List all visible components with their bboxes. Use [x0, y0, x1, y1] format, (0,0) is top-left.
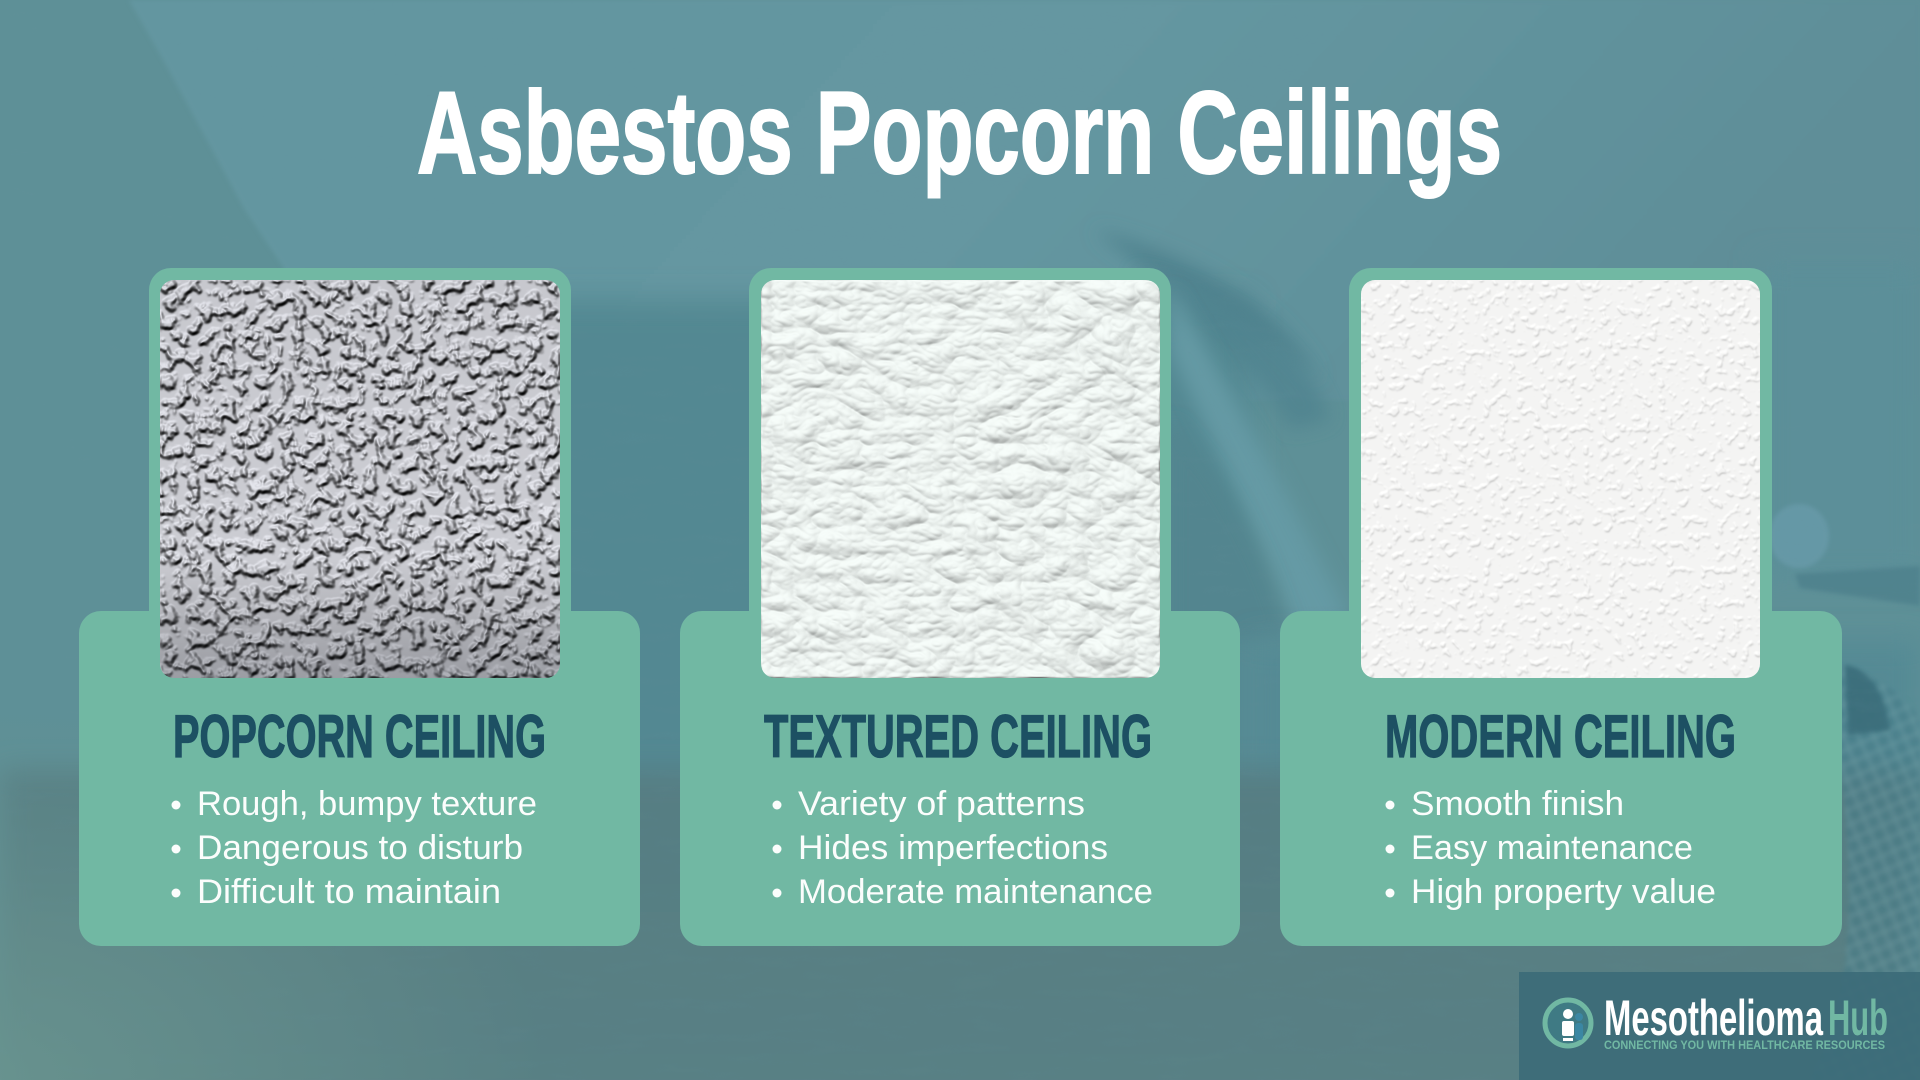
bullet list: Difficult to maintain [197, 873, 501, 911]
bullet list: High property value [1411, 873, 1716, 911]
heading: TEXTURED CEILING [764, 703, 1152, 770]
panel: modern ceiling [1280, 268, 1842, 946]
icon: people in ring [1545, 1000, 1591, 1046]
panel: textured ceiling [680, 268, 1240, 946]
image: textured surface [761, 280, 1160, 678]
bullet list: Smooth finish [1411, 785, 1624, 823]
bullet list: Moderate maintenance [798, 873, 1153, 911]
bullet list [1386, 785, 1716, 911]
bullet list [172, 785, 537, 911]
image: popcorn texture [160, 280, 560, 678]
bullet list: Variety of patterns [798, 785, 1085, 823]
heading: MODERN CEILING [1385, 703, 1736, 770]
bullet list: Easy maintenance [1411, 829, 1693, 867]
bullet list: Rough, bumpy texture [197, 785, 537, 823]
card background [79, 268, 640, 946]
heading: POPCORN CEILING [173, 703, 546, 770]
title: Asbestos Popcorn Ceilings [417, 67, 1502, 198]
logo block [1519, 972, 1920, 1080]
card background [680, 268, 1240, 946]
bullet list: Dangerous to disturb [197, 829, 523, 867]
bullet list [772, 785, 1153, 911]
card background [1280, 268, 1842, 946]
panel: popcorn ceiling [79, 268, 640, 946]
logo tagline: CONNECTING YOU WITH HEALTHCARE RESOURCES [1604, 1038, 1885, 1052]
bullet list: Hides imperfections [798, 829, 1108, 867]
image: smooth surface [1361, 280, 1760, 678]
